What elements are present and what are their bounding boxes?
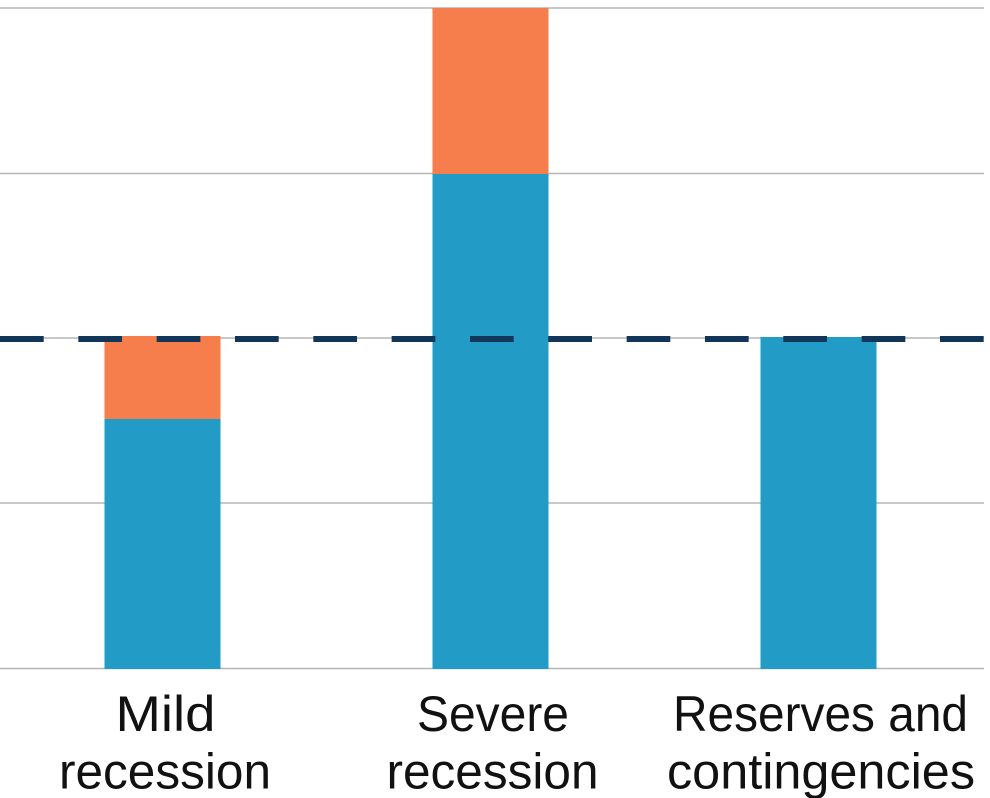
- bar: reserves and contingencies: [760, 337, 876, 669]
- bar: severe recession: [432, 8, 548, 669]
- label: reserves and contingencies: Reserves and: [673, 686, 968, 742]
- label: reserves and contingencies: contingencies: [667, 744, 975, 798]
- label: mild recession: recession: [59, 744, 271, 798]
- label: severe recession: Severe: [417, 686, 569, 742]
- label: severe recession: [386, 686, 598, 798]
- bar: mild recession: [104, 336, 220, 669]
- label: reserves and contingencies: [667, 686, 975, 798]
- label: mild recession: Mild: [116, 686, 216, 742]
- dashed reference line: [0, 336, 984, 342]
- label: mild recession: [59, 686, 271, 798]
- label: severe recession: recession: [386, 744, 598, 798]
